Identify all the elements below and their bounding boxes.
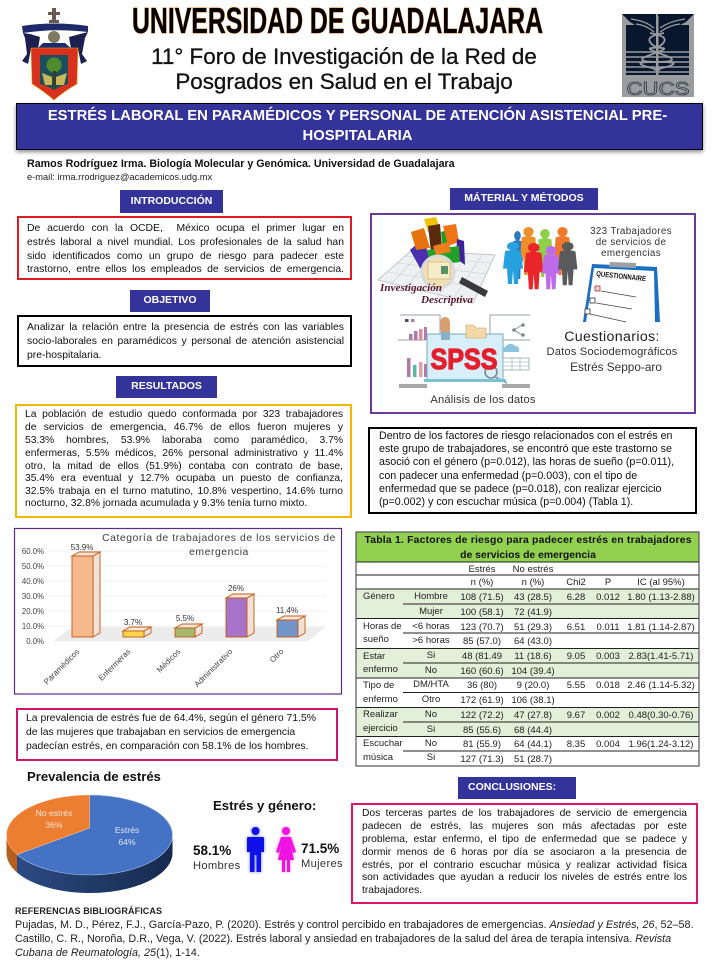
table 1: factores de riesgo: 0.011 xyxy=(596,622,620,633)
bar chart: categoría de trabajadores: emergencia xyxy=(189,547,249,558)
table 1: factores de riesgo: 2.46 (1.14-5.32) xyxy=(627,680,695,691)
panel: conclusiones: trabajadores. xyxy=(362,885,422,896)
table 1: factores de riesgo: 104 (39.4) xyxy=(511,666,555,677)
table 1: factores de riesgo: 5.55 xyxy=(567,680,585,691)
panel: material y métodos xyxy=(370,213,696,414)
bar chart: categoría de trabajadores: Categoría de trabajadores de los servicios de xyxy=(102,533,336,544)
panel: resultados: La población de estudio quedo conformada por 323 trabajadores xyxy=(25,409,343,420)
title banner: ESTRÉS LABORAL EN PARAMÉDICOS Y PERSONAL DE ATENCIÓN ASISTENCIAL PRE- xyxy=(48,108,667,124)
panel: conclusiones: estrés, por el contrario escuchar música y realizar actividad física xyxy=(362,860,687,871)
panel: resultados: 32.5% trabaja en el turno matutino, 10.8% vespertino, 14.6% turno xyxy=(25,486,343,497)
bar chart: categoría de trabajadores: 50.0% xyxy=(22,562,44,571)
table 1: factores de riesgo: música xyxy=(363,752,394,763)
forum subtitle: Posgrados en Salud en el Trabajo xyxy=(175,69,513,94)
table 1: factores de riesgo: ejercicio xyxy=(363,723,398,734)
table 1: factores de riesgo: 123 (70.7) xyxy=(460,622,504,633)
text: cuestionarios: Análisis de los datos xyxy=(430,394,536,406)
stat: mujeres xyxy=(301,841,343,870)
table 1: factores de riesgo: 6.28 xyxy=(567,592,585,603)
table 1: factores de riesgo: Horas de xyxy=(363,621,402,632)
heading: material y métodos xyxy=(450,188,598,210)
bar chart: categoría de trabajadores: 53.9% xyxy=(71,543,93,552)
table 1: factores de riesgo: 11 (18.6) xyxy=(514,651,552,662)
heading: introducción xyxy=(120,190,223,213)
text: 323 trabajadores: emergencias xyxy=(601,248,661,259)
table 1: factores de riesgo: 106 (38.1) xyxy=(511,695,555,706)
panel: conclusiones xyxy=(351,803,698,904)
table 1: factores de riesgo: Tipo de xyxy=(363,680,394,691)
table 1: factores de riesgo: Hombre xyxy=(414,591,448,602)
icon: investigación descriptiva: Investigación xyxy=(379,283,442,294)
author: Ramos Rodríguez Irma. Biología Molecular y Genómica. Universidad de Guadalajara xyxy=(27,158,455,170)
bar chart: categoría de trabajadores: Administrativo xyxy=(193,647,235,689)
table 1: factores de riesgo: Tabla 1. Factores de riesgo para padecer estrés en trabajadores xyxy=(364,535,692,546)
text: 323 trabajadores: 323 Trabajadores xyxy=(590,226,672,237)
heading: objetivo xyxy=(130,290,210,312)
panel: conclusiones: son actividades que ayudan a reducir los niveles de estrés entre los xyxy=(362,872,687,883)
bar chart: categoría de trabajadores: 3.7% xyxy=(124,618,142,627)
panel: objetivo: socio-laborales en paramédicos y personal de atención asistencial xyxy=(27,336,344,347)
panel: introducción xyxy=(17,216,352,280)
table 1: factores de riesgo: DM/HTA xyxy=(413,679,450,690)
references: REFERENCIAS BIBLIOGRÁFICAS xyxy=(15,906,162,916)
table 1: factores de riesgo: n (%) xyxy=(471,577,493,588)
table 1: factores de riesgo: 8.35 xyxy=(567,739,585,750)
table 1: factores de riesgo: 9.05 xyxy=(567,651,585,662)
table 1: factores de riesgo: 51 (28.7) xyxy=(514,754,552,765)
stat: mujeres: Mujeres xyxy=(301,858,343,870)
table 1: factores de riesgo: 160 (60.6) xyxy=(460,666,504,677)
bar chart: categoría de trabajadores: 60.0% xyxy=(22,547,44,556)
bar chart: categoría de trabajadores: Otro xyxy=(268,647,286,664)
panel: prevalencia texto: La prevalencia de estrés fue de 64.4%, según el género 71.5% xyxy=(26,713,316,724)
panel: conclusiones: dormir menos de 6 horas por día se asociaron a la presencia de xyxy=(362,847,687,858)
table 1: factores de riesgo: 108 (71.5) xyxy=(460,592,504,603)
table 1: factores de riesgo: No xyxy=(425,738,437,749)
bar chart: categoría de trabajadores: Enfermeras xyxy=(97,647,132,683)
table 1: factores de riesgo: 1.96(1.24-3.12) xyxy=(629,739,693,750)
table 1: factores de riesgo: Realizar xyxy=(363,709,398,720)
table 1: factores de riesgo: n (%) xyxy=(522,577,544,588)
icon: investigación descriptiva: Descriptiva xyxy=(420,295,474,306)
icon: cuestionario: QUESTIONNAIRE xyxy=(596,269,647,283)
table 1: factores de riesgo: IC (al 95%) xyxy=(637,577,685,588)
text: cuestionarios: Estrés Seppo-aro xyxy=(570,360,662,374)
table 1: factores de riesgo: 1.81 (1.14-2.87) xyxy=(627,622,695,633)
panel: factores de riesgo: este grupo de trabajadores, se encontró que este trastorno se xyxy=(379,443,672,455)
table 1: factores de riesgo: No xyxy=(425,709,437,720)
logo: CUCS: CUCS xyxy=(626,79,690,99)
table 1: factores de riesgo: 2.83(1.41-5.71) xyxy=(629,651,693,662)
bar chart: categoría de trabajadores: 0.0% xyxy=(26,637,44,646)
heading: conclusiones: CONCLUSIONES: xyxy=(468,781,556,793)
table 1: factores de riesgo: 85 (57.0) xyxy=(463,636,501,647)
table 1: factores de riesgo: 64 (44.1) xyxy=(514,739,552,750)
table 1: factores de riesgo: 68 (44.4) xyxy=(514,725,552,736)
panel: introducción: estrés laboral a nivel mundial. Los profesionales de la salud han xyxy=(27,237,344,248)
table 1: factores de riesgo: 127 (71.3) xyxy=(460,754,504,765)
stat: hombres: Hombres xyxy=(193,860,240,872)
panel: prevalencia texto: de las mujeres que trabajaban en servicios de emergencia xyxy=(26,727,295,738)
panel: conclusiones: Dos terceras partes de los trabajadores de servicio de emergencia xyxy=(362,808,687,819)
table 1: factores de riesgo: Género xyxy=(363,591,395,602)
table 1: factores de riesgo: 122 (72.2) xyxy=(460,710,504,721)
bar chart: categoría de trabajadores: Médicos xyxy=(155,647,182,674)
panel: introducción: sido identificados como un grupo de riesgo para padecer este xyxy=(27,251,344,262)
panel: introducción: De acuerdo con la OCDE, México ocupa el primer lugar en xyxy=(27,223,344,234)
table 1: factores de riesgo: 100 (58.1) xyxy=(460,607,504,618)
stat: mujeres: 71.5% xyxy=(301,841,339,856)
panel: objetivo xyxy=(17,315,352,367)
panel: factores de riesgo xyxy=(368,427,697,514)
panel: factores de riesgo: Dentro de los factores de riesgo relacionados con el estrés en xyxy=(379,430,672,442)
bar chart: categoría de trabajadores: Paramédicos xyxy=(42,647,81,686)
table 1: factores de riesgo: 6.51 xyxy=(567,622,585,633)
references: Pujadas, M. D., Pérez, F.J., García-Pazo, P. (2020). Estrés y control percibido en trabajadores de emergencias. Ansiedad y Estrés, 26, 52–58. xyxy=(15,919,694,931)
table 1: factores de riesgo: 9 (20.0) xyxy=(517,680,549,691)
table 1: factores de riesgo: 0.003 xyxy=(596,651,620,662)
table 1: factores de riesgo: Mujer xyxy=(419,606,443,617)
table 1: factores de riesgo: >6 horas xyxy=(412,635,450,646)
table 1: factores de riesgo: 48 (81.49 xyxy=(462,651,502,662)
bar chart: categoría de trabajadores: 10.0% xyxy=(22,622,44,631)
table 1: factores de riesgo: 0.012 xyxy=(596,592,620,603)
table 1: factores de riesgo: 0.48(0.30-0.76) xyxy=(629,710,693,721)
panel: conclusiones: padecen de estrés, las mujeres son más afectadas por este xyxy=(362,821,687,832)
panel: resultados: 53.3% hombres, 53.9% laboraba como paramédico, 3.7% xyxy=(25,435,343,446)
table 1: factores de riesgo: 64 (43.0) xyxy=(514,636,552,647)
pie chart: prevalencia: No estrés xyxy=(36,808,72,818)
references xyxy=(15,906,694,959)
references: Castillo, C. R., Noroña, D.R., Vega, V. (2022). Estrés laboral y ansiedad en trabajadores de la salud del área de terapia intensiva. Revista xyxy=(15,933,671,945)
table 1: factores de riesgo: 43 (28.5) xyxy=(514,592,552,603)
stat: hombres xyxy=(193,843,240,872)
panel: resultados xyxy=(15,404,352,518)
table 1: factores de riesgo: Si xyxy=(427,752,435,763)
heading: conclusiones xyxy=(458,777,576,799)
panel: objetivo: pre-hospitalaria. xyxy=(27,350,102,361)
forum subtitle xyxy=(151,44,537,94)
table 1: factores de riesgo: sueño xyxy=(363,634,389,645)
table 1: factores de riesgo: Si xyxy=(427,724,435,735)
heading: material y métodos: MÁTERIAL Y MÉTODOS xyxy=(464,192,584,204)
heading: estrés y género: Estrés y género: xyxy=(213,798,316,813)
table 1: factores de riesgo: 85 (55.6) xyxy=(463,725,501,736)
panel: factores de riesgo: enfermedad que se padece (p=0.018), con realizar ejercicio xyxy=(379,483,662,495)
table 1: factores de riesgo: 72 (41.9) xyxy=(514,607,552,618)
table 1: factores de riesgo: P xyxy=(605,577,611,588)
text: cuestionarios: Cuestionarios: xyxy=(564,329,660,345)
bar chart: categoría de trabajadores: 20.0% xyxy=(22,607,44,616)
panel: factores de riesgo: (p=0.002) y con escuchar música (p=0.004) (Tabla 1). xyxy=(379,496,633,508)
panel: introducción: trastorno, entre ellos los empleados de servicios de emergencia. xyxy=(27,264,344,275)
table 1: factores de riesgo: Estrés xyxy=(469,564,496,575)
table 1: factores de riesgo: 0.004 xyxy=(596,739,620,750)
heading: prevalencia de estrés: Prevalencia de estrés xyxy=(27,769,161,784)
panel: prevalencia texto: padecían estrés, en comparación con 58.1% de los hombres. xyxy=(26,741,308,752)
table 1: factores de riesgo: 1.80 (1.13-2.88) xyxy=(627,592,695,603)
table 1: factores de riesgo: <6 horas xyxy=(412,621,450,632)
table 1: factores de riesgo: 36 (80) xyxy=(467,680,497,691)
table 1: factores de riesgo: 51 (29.3) xyxy=(514,622,552,633)
panel: objetivo: Analizar la relación entre la presencia de estrés con las variables xyxy=(27,322,344,333)
bar chart: categoría de trabajadores: 26% xyxy=(228,584,244,593)
panel: resultados: de servicios de emergencia, 46.7% de ellos fueron mujeres y xyxy=(25,422,343,433)
pie chart: prevalencia: Estrés xyxy=(115,825,139,835)
text: 323 trabajadores: de servicios de xyxy=(596,237,666,248)
references: Cubana de Reumatología, 25(1), 1-14. xyxy=(15,947,200,959)
table 1: factores de riesgo: Escuchar xyxy=(363,738,403,749)
heading: resultados: RESULTADOS xyxy=(131,380,202,392)
table 1: factores de riesgo: Estar xyxy=(363,651,385,662)
bar chart: categoría de trabajadores: 11.4% xyxy=(276,606,298,615)
panel: factores de riesgo: asoció con el género (p=0.012), las horas de sueño (p=0.011), xyxy=(379,456,674,468)
panel: conclusiones: problema, estar enfermo, el tipo de enfermedad que se padece y xyxy=(362,834,687,845)
heading: resultados xyxy=(116,376,217,398)
table 1: factores de riesgo: enfermo xyxy=(363,664,398,675)
table 1: factores de riesgo: enfermo xyxy=(363,694,398,705)
panel: resultados: nocturno, 32.8% jornada acumulada y 9.3% tenía turno mixto. xyxy=(25,498,307,509)
table 1: factores de riesgo: 172 (61.9) xyxy=(460,695,504,706)
table 1: factores de riesgo: No xyxy=(425,665,437,676)
table 1: factores de riesgo: de servicios de emergencia xyxy=(460,550,596,561)
bar chart: categoría de trabajadores: 40.0% xyxy=(22,577,44,586)
table 1: factores de riesgo: 0.018 xyxy=(596,680,620,691)
table 1: factores de riesgo: 47 (27.8) xyxy=(514,710,552,721)
title banner: HOSPITALARIA xyxy=(303,128,412,144)
heading: introducción: INTRODUCCIÓN xyxy=(131,195,212,207)
table 1: factores de riesgo: Otro xyxy=(422,694,440,705)
stat: hombres: 58.1% xyxy=(193,843,231,858)
title banner xyxy=(16,103,703,150)
panel: resultados: otro, la mitad de ellos (51.9%) contaba con contrato de base, xyxy=(25,461,343,472)
heading: objetivo: OBJETIVO xyxy=(143,294,197,306)
table 1: factores de riesgo: Si xyxy=(427,650,435,661)
panel: resultados: enfermeras, 5.5% médicos, 26% personal administrativo y 11.4% xyxy=(25,448,343,459)
university title: UNIVERSIDAD DE GUADALAJARA xyxy=(132,0,543,41)
panel: prevalencia texto xyxy=(16,708,338,761)
table 1: factores de riesgo: Chi2 xyxy=(566,577,586,588)
table 1: factores de riesgo: 9.67 xyxy=(567,710,585,721)
panel: factores de riesgo: con padecer una enfermedad (p=0.003), con el tipo de xyxy=(379,470,637,482)
icon: SPSS análisis: SPSS xyxy=(430,344,498,376)
panel: resultados: 35.4% era eventual y 12.7% ocupaba un puesto de confianza, xyxy=(25,473,343,484)
table 1: factores de riesgo: 81 (55.9) xyxy=(463,739,501,750)
table 1: factores de riesgo: 0.002 xyxy=(596,710,620,721)
bar chart: categoría de trabajadores: 5.5% xyxy=(176,614,194,623)
forum subtitle: 11° Foro de Investigación de la Red de xyxy=(151,44,537,69)
pie chart: prevalencia: 64% xyxy=(118,837,136,847)
pie chart: prevalencia: 36% xyxy=(45,820,63,830)
bar chart: categoría de trabajadores: 30.0% xyxy=(22,592,44,601)
email: e-mail: irma.rrodriguez@academicos.udg.mx xyxy=(27,172,212,182)
table 1: factores de riesgo: No estrés xyxy=(513,564,554,575)
text: cuestionarios: Datos Sociodemográficos xyxy=(547,346,678,358)
